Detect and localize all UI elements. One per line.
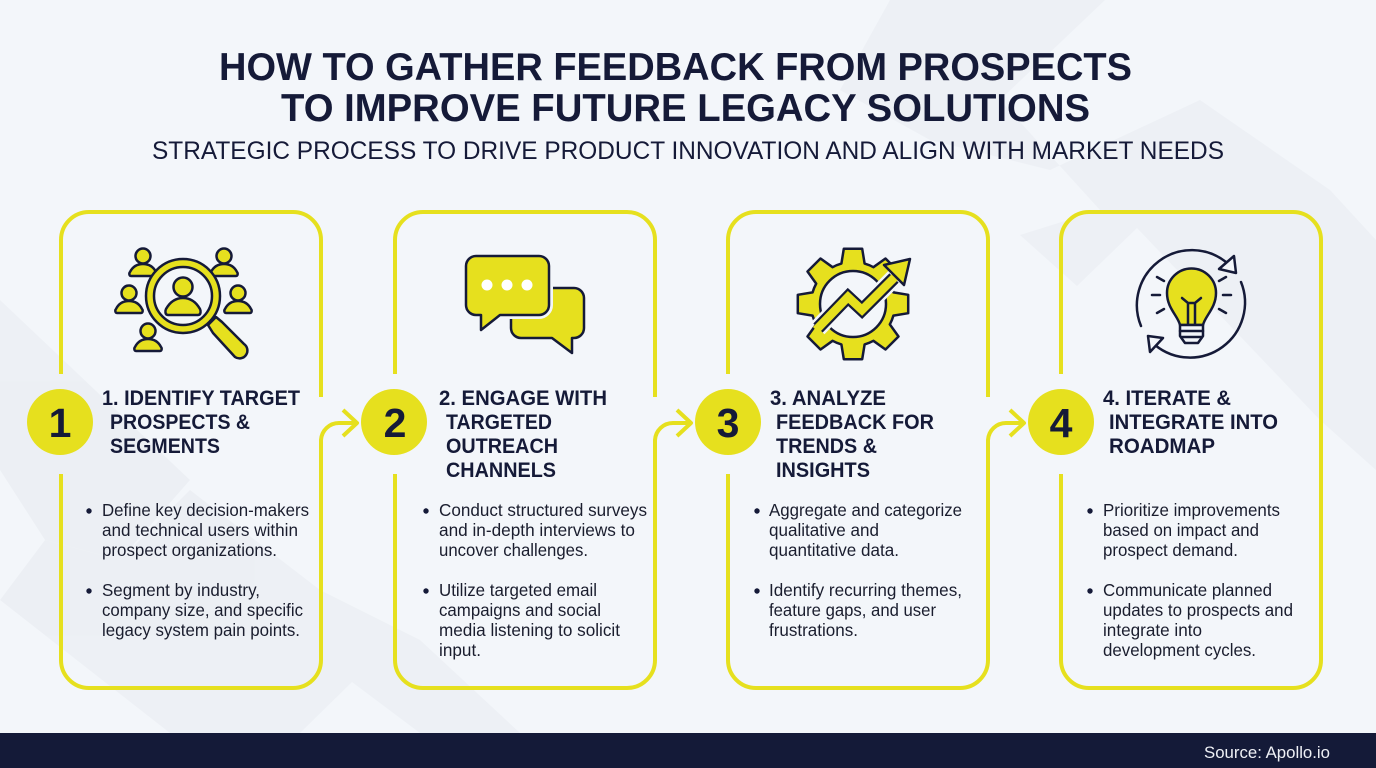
step 1 heading: PROSPECTS & <box>110 411 250 434</box>
title: TO IMPROVE FUTURE LEGACY SOLUTIONS <box>281 87 1090 130</box>
step 2 bullets: campaigns and social <box>439 600 601 620</box>
step 1 bullets <box>86 500 309 640</box>
step 4 heading: ROADMAP <box>1109 435 1215 458</box>
step 3 bullets: qualitative and <box>769 520 879 540</box>
step 4 bullets: prospect demand. <box>1103 540 1238 560</box>
step 4 heading: 4. ITERATE & <box>1103 387 1231 410</box>
panel 4 border <box>1061 212 1321 688</box>
step 3 heading <box>770 387 934 482</box>
step 3 bullets: Aggregate and categorize <box>769 500 962 520</box>
icon: light bulb with cycle arrows <box>1137 250 1245 358</box>
step 2 bullets: uncover challenges. <box>439 540 588 560</box>
step 3 bullets: Identify recurring themes, <box>769 580 962 600</box>
icon: people under magnifying glass <box>115 248 252 358</box>
step 4 number badge: 4 <box>1050 400 1073 446</box>
step 2 number badge: 2 <box>384 400 406 446</box>
step 4 bullets: integrate into <box>1103 620 1202 640</box>
panel 3 border <box>728 212 988 688</box>
step 3 bullets: feature gaps, and user <box>769 600 936 620</box>
step 1 bullets: company size, and specific <box>102 600 303 620</box>
step 1 bullets: and technical users within <box>102 520 298 540</box>
step 1 heading <box>102 387 300 458</box>
step 1 bullets: prospect organizations. <box>102 540 277 560</box>
step 2 bullets: input. <box>439 640 481 660</box>
step 2 heading: TARGETED <box>446 411 552 434</box>
step 4 bullets: Communicate planned <box>1103 580 1272 600</box>
panel: step 1 <box>27 212 321 688</box>
step 4 heading <box>1103 387 1278 458</box>
step 2 heading <box>439 387 607 482</box>
panel: step 4 <box>1028 212 1321 688</box>
step 2 heading: 2. ENGAGE WITH <box>439 387 607 410</box>
footer bar <box>0 733 1376 768</box>
icon: gear with rising arrow <box>798 249 910 359</box>
step 4 number badge <box>1028 389 1094 455</box>
step 4 heading: INTEGRATE INTO <box>1109 411 1278 434</box>
arrow: step 1 to step 2 <box>321 410 357 442</box>
arrow: step 3 to step 4 <box>988 410 1024 442</box>
step 4 bullets: based on impact and <box>1103 520 1259 540</box>
panel 1 border <box>61 212 321 688</box>
step 3 bullets <box>754 500 962 640</box>
step 3 bullets: frustrations. <box>769 620 858 640</box>
step 4 bullets: updates to prospects and <box>1103 600 1293 620</box>
step 2 bullets: Utilize targeted email <box>439 580 597 600</box>
step 1 bullets: Segment by industry, <box>102 580 260 600</box>
step 2 bullets <box>423 500 647 660</box>
step 3 bullets: quantitative data. <box>769 540 899 560</box>
step 3 heading: FEEDBACK FOR <box>776 411 934 434</box>
panel: step 2 <box>361 212 655 688</box>
step 1 heading: SEGMENTS <box>110 435 220 458</box>
step 2 bullets: and in-depth interviews to <box>439 520 635 540</box>
step 3 number badge: 3 <box>717 400 739 446</box>
step 1 number badge: 1 <box>49 400 71 446</box>
step 4 bullets: development cycles. <box>1103 640 1256 660</box>
step 4 bullets <box>1087 500 1293 660</box>
step 2 number badge <box>361 389 427 455</box>
arrow: step 2 to step 3 <box>655 410 691 442</box>
step 2 bullets: Conduct structured surveys <box>439 500 647 520</box>
subtitle: STRATEGIC PROCESS TO DRIVE PRODUCT INNOVATION AND ALIGN WITH MARKET NEEDS <box>152 137 1224 165</box>
panel: step 3 <box>695 212 988 688</box>
source credit: Source: Apollo.io <box>1204 743 1330 762</box>
step 3 heading: TRENDS & <box>776 435 877 458</box>
step 1 number badge <box>27 389 93 455</box>
title: HOW TO GATHER FEEDBACK FROM PROSPECTS <box>219 46 1132 89</box>
step 2 heading: CHANNELS <box>446 459 556 482</box>
title <box>219 46 1132 130</box>
icon: chat bubbles <box>466 256 584 353</box>
step 2 bullets: media listening to solicit <box>439 620 620 640</box>
step 1 bullets: Define key decision-makers <box>102 500 309 520</box>
step 1 heading: 1. IDENTIFY TARGET <box>102 387 300 410</box>
step 3 heading: 3. ANALYZE <box>770 387 886 410</box>
panel 2 border <box>395 212 655 688</box>
step 2 heading: OUTREACH <box>446 435 558 458</box>
step 3 number badge <box>695 389 761 455</box>
step 1 bullets: legacy system pain points. <box>102 620 300 640</box>
step 4 bullets: Prioritize improvements <box>1103 500 1280 520</box>
step 3 heading: INSIGHTS <box>776 459 870 482</box>
